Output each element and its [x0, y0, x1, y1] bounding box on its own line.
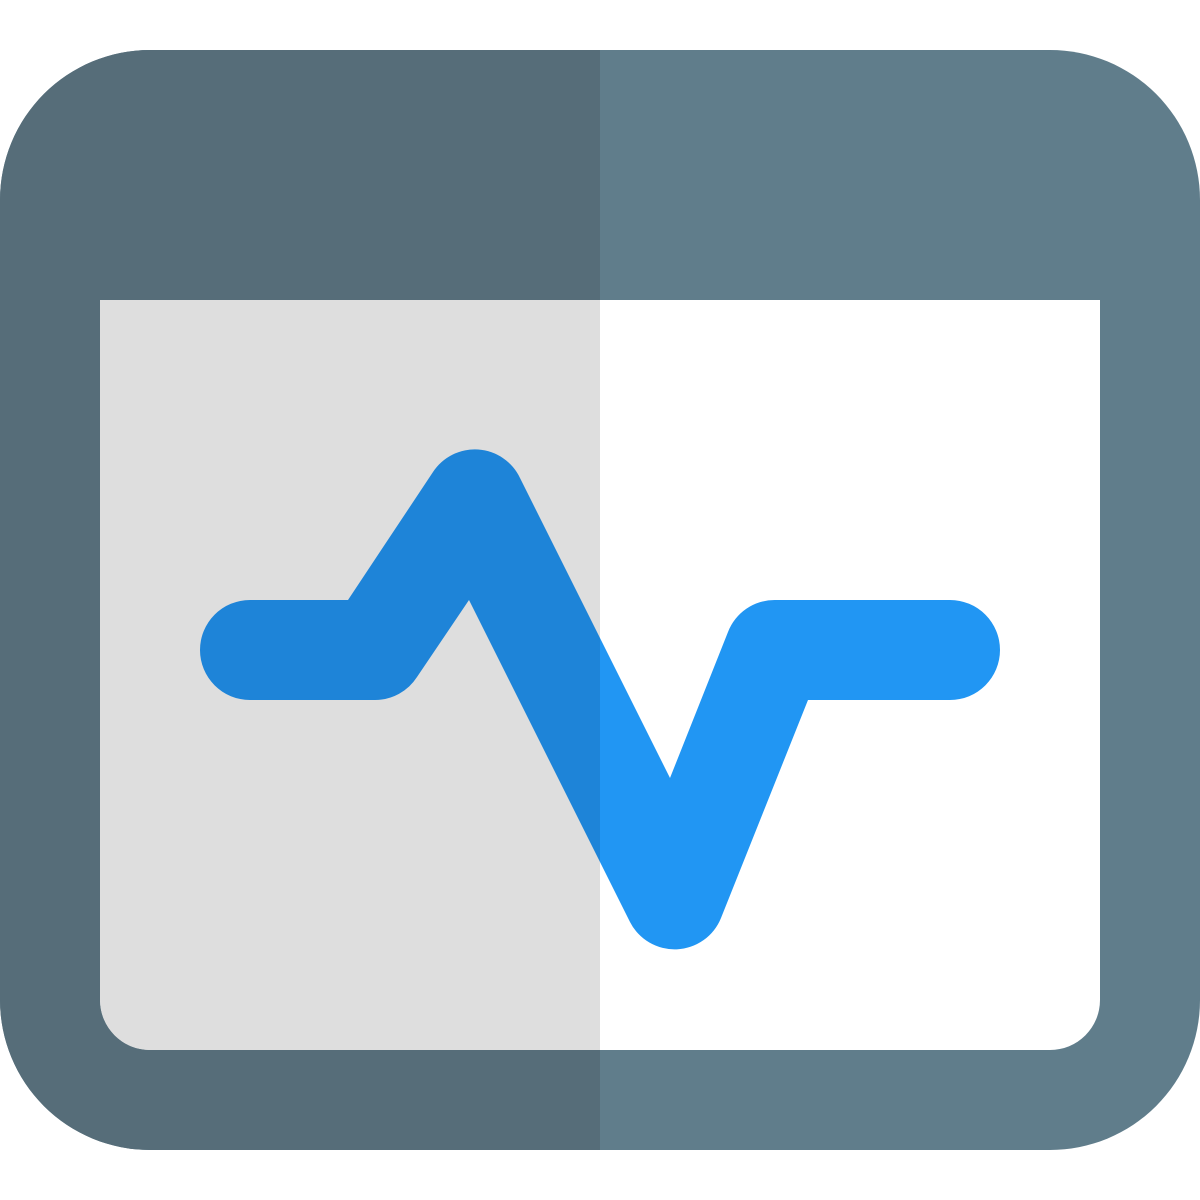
left half shade: [0, 50, 600, 1150]
window content area: [100, 300, 1100, 1050]
pulse line: [200, 449, 1000, 949]
